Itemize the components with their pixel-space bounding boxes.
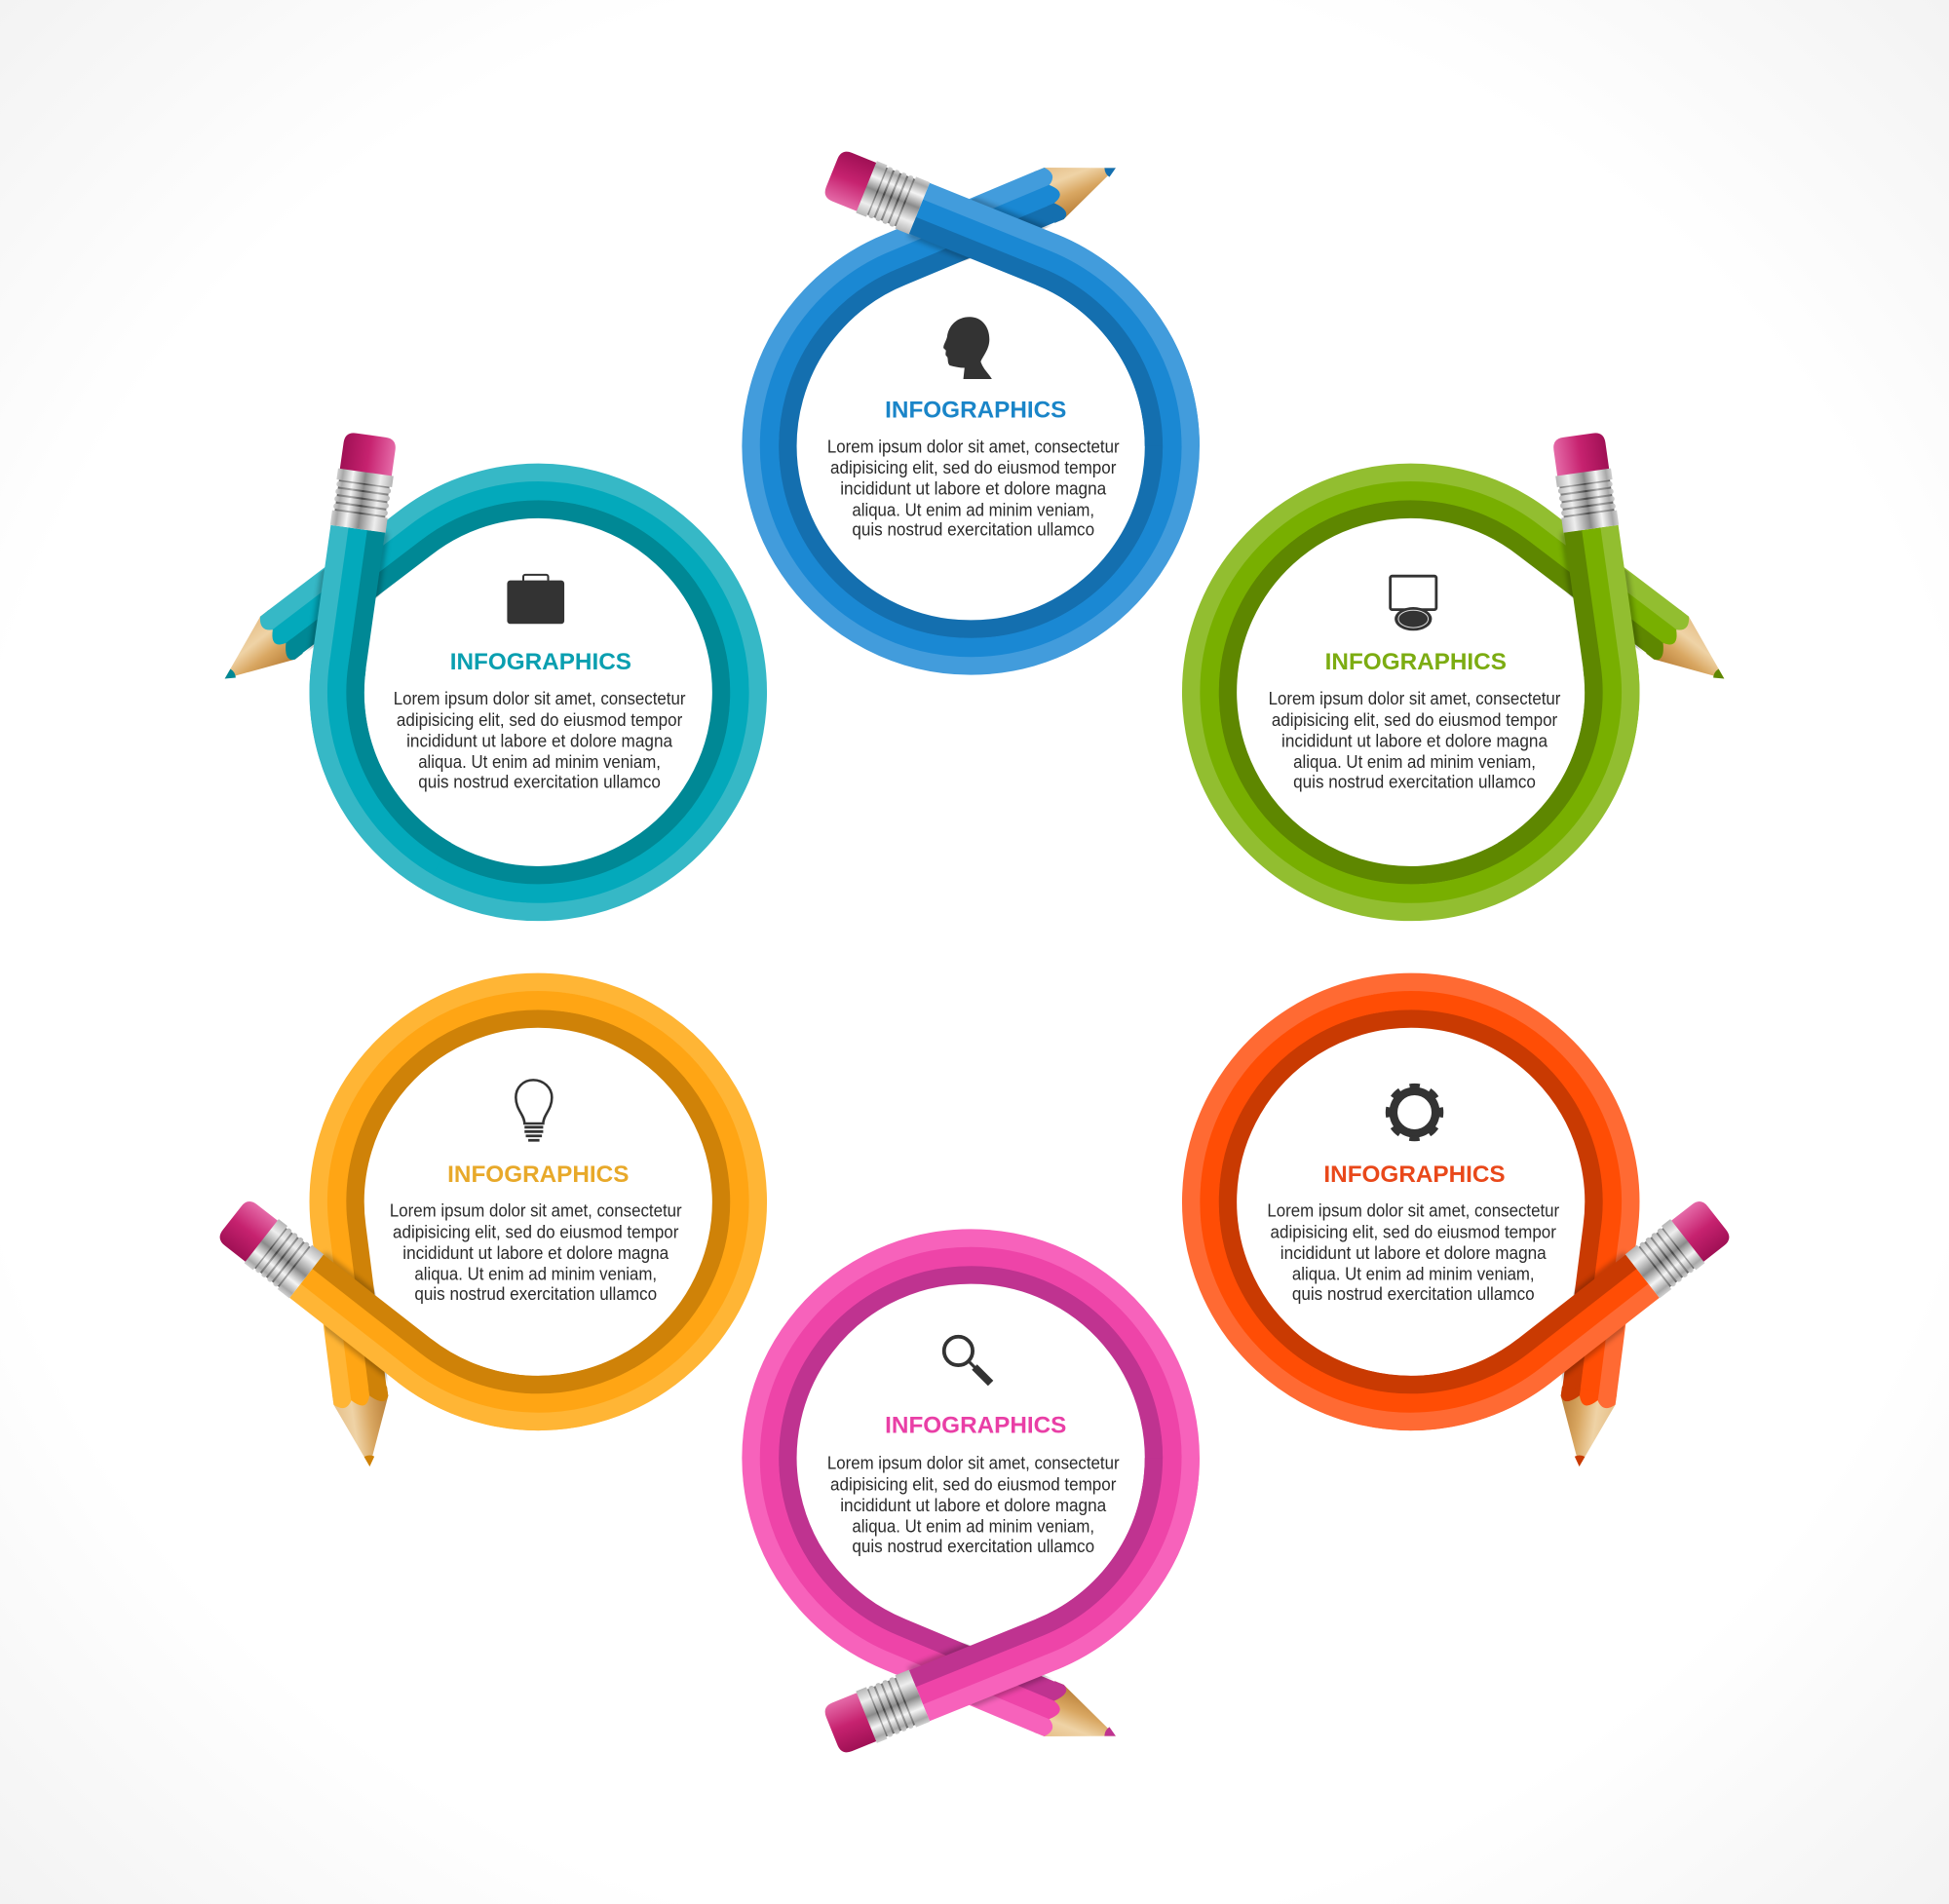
panel: orange pencil ring [166,902,838,1543]
text block: orange: Lorem ipsum dolor sit amet, consectetur [390,1200,682,1221]
icon: light bulb [516,1080,552,1140]
text block: teal: aliqua. Ut enim ad minim veniam, [418,751,661,772]
text block: red: adipisicing elit, sed do eiusmod tempor [1271,1221,1556,1241]
heading: orange: INFOGRAPHICS [447,1161,629,1188]
text block: red: Lorem ipsum dolor sit amet, consectetur [1267,1200,1559,1221]
text block: teal: incididunt ut labore et dolore magna [406,731,673,751]
text block: green [1269,688,1560,792]
icon: monitor [1391,576,1436,630]
panel: green pencil ring [1111,351,1783,992]
green pencil [1111,351,1783,992]
text block: blue: aliqua. Ut enim ad minim veniam, [852,499,1094,519]
blue pencil [751,143,1191,666]
text block: red: incididunt ut labore et dolore magna [1280,1242,1547,1263]
text block: orange: quis nostrud exercitation ullamco [414,1283,657,1304]
text block: orange: aliqua. Ut enim ad minim veniam, [414,1264,657,1284]
heading: green: INFOGRAPHICS [1325,649,1507,675]
text block: pink: incididunt ut labore et dolore magna [840,1495,1107,1515]
text block: teal: Lorem ipsum dolor sit amet, consectetur [394,688,685,708]
icon: briefcase [507,575,564,624]
text block: pink: aliqua. Ut enim ad minim veniam, [852,1516,1094,1537]
text block: blue: Lorem ipsum dolor sit amet, consectetur [827,436,1120,456]
red pencil [1111,902,1783,1543]
text block: red: aliqua. Ut enim ad minim veniam, [1292,1264,1535,1284]
heading: blue: INFOGRAPHICS [885,398,1066,424]
text block: pink: quis nostrud exercitation ullamco [852,1536,1094,1556]
text block: red: quis nostrud exercitation ullamco [1292,1283,1535,1304]
text block: green: Lorem ipsum dolor sit amet, consectetur [1269,688,1560,708]
heading: pink: INFOGRAPHICS [885,1413,1066,1439]
pink pencil [751,1238,1191,1761]
text block: pink: Lorem ipsum dolor sit amet, consectetur [827,1453,1120,1473]
text block: blue [827,436,1120,540]
text block: green: incididunt ut labore et dolore magna [1281,731,1548,751]
text block: teal: adipisicing elit, sed do eiusmod tempor [397,709,682,730]
text block: pink [827,1453,1120,1556]
text block: blue: incididunt ut labore et dolore magna [840,478,1107,499]
heading: red: INFOGRAPHICS [1323,1161,1506,1188]
icon: head silhouette [943,317,992,379]
text block: teal: quis nostrud exercitation ullamco [418,772,661,792]
panel: red pencil ring [1111,902,1783,1543]
text block: green: quis nostrud exercitation ullamco [1293,772,1536,792]
text block: orange [390,1200,682,1304]
teal pencil [166,351,838,992]
text block: red [1267,1200,1559,1304]
orange pencil [166,902,838,1543]
heading: teal: INFOGRAPHICS [450,649,631,675]
panel: blue pencil ring [751,143,1191,666]
text block: orange: adipisicing elit, sed do eiusmod tempor [393,1221,678,1241]
panel: pink pencil ring [751,1238,1191,1761]
text block: blue: quis nostrud exercitation ullamco [852,519,1094,540]
panel: teal pencil ring [166,351,838,992]
icon: gear [1389,1086,1440,1138]
text block: green: adipisicing elit, sed do eiusmod tempor [1272,709,1557,730]
text block: pink: adipisicing elit, sed do eiusmod tempor [830,1473,1116,1494]
text block: orange: incididunt ut labore et dolore magna [402,1242,669,1263]
text block: green: aliqua. Ut enim ad minim veniam, [1293,751,1536,772]
icon: magnifying glass [944,1337,991,1384]
text block: blue: adipisicing elit, sed do eiusmod tempor [830,457,1116,477]
text block: teal [394,688,685,792]
